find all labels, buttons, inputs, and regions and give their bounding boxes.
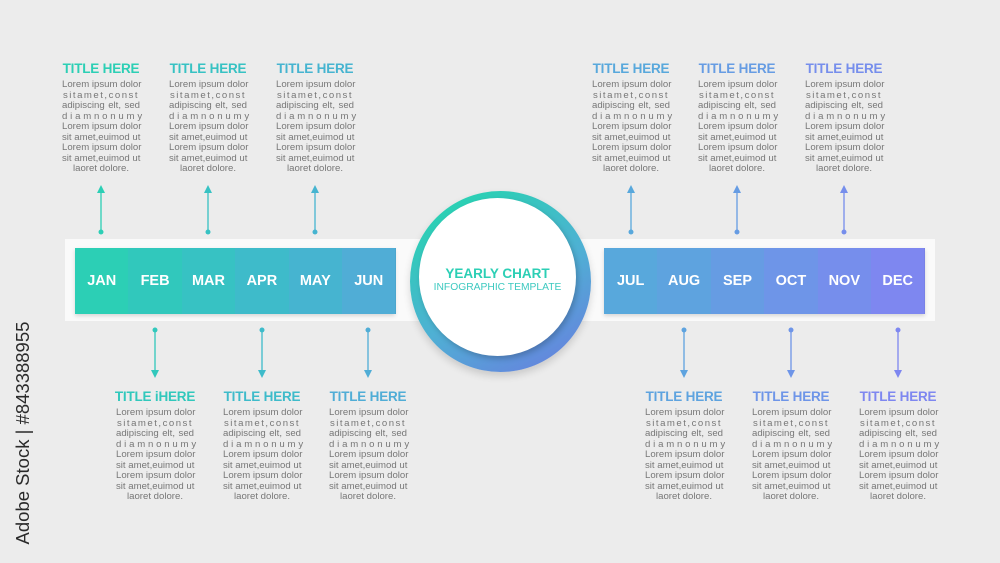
month: FEB <box>128 248 183 314</box>
text block: NOV <box>805 61 888 174</box>
text block: SEP: adipiscing elt, sed <box>698 100 776 111</box>
month: NOV: NOV <box>829 273 860 289</box>
text block: FEB: Lorem ipsum dolor <box>116 449 195 460</box>
text block: JUN: Lorem ipsum dolor <box>329 407 408 418</box>
text block: JUN: TITLE HERE <box>330 389 406 404</box>
text block: JUN: Lorem ipsum dolor <box>329 470 408 481</box>
text block: JAN: TITLE HERE <box>63 61 139 76</box>
text block: NOV: sitamet,const <box>806 90 882 100</box>
text block: SEP: laoret dolore. <box>709 163 765 174</box>
text block: FEB: TITLE iHERE <box>115 389 195 404</box>
month bar: Jul-Dec <box>604 248 925 314</box>
text block: MAY: sit amet,euimod ut <box>276 132 354 142</box>
month: OCT <box>764 248 819 314</box>
watermark: vertical stock id: Adobe Stock | #843388955 <box>12 322 33 544</box>
text block: JAN: Lorem ipsum dolor <box>62 121 141 132</box>
month: JAN: JAN <box>87 273 116 289</box>
inner white disc with title <box>419 198 576 356</box>
text block: JUL: TITLE HERE <box>593 61 669 76</box>
arrow: SEP <box>733 185 741 234</box>
month: JUL <box>604 248 658 314</box>
text block: FEB: sitamet,const <box>117 418 193 428</box>
text block: JAN: adipiscing elt, sed <box>62 100 140 111</box>
text block: NOV: Lorem ipsum dolor <box>805 79 884 90</box>
text block: MAY: Lorem ipsum dolor <box>276 142 355 153</box>
text block: JUL: laoret dolore. <box>603 163 659 174</box>
arrow: MAR <box>204 185 212 234</box>
text block: JUL: sit amet,euimod ut <box>592 132 670 142</box>
arrow: FEB <box>151 328 159 378</box>
text block: SEP: sitamet,const <box>699 90 775 100</box>
text block: APR: sit amet,euimod ut <box>223 480 301 492</box>
arrow: JUL <box>627 185 635 234</box>
month: AUG: AUG <box>668 273 700 289</box>
text block: AUG: Lorem ipsum dolor <box>645 449 724 460</box>
text block: DEC: Lorem ipsum dolor <box>859 449 938 460</box>
month: MAR: MAR <box>192 273 225 289</box>
text block: SEP: Lorem ipsum dolor <box>698 142 777 153</box>
text block: MAY: sitamet,const <box>277 90 353 100</box>
month: APR <box>235 248 290 314</box>
center circle <box>410 191 591 372</box>
text block: APR: Lorem ipsum dolor <box>223 449 302 460</box>
text block: JUN <box>329 389 412 502</box>
text block: JAN: laoret dolore. <box>73 163 129 174</box>
text block: MAR: sit amet,euimod ut <box>169 132 247 142</box>
month: MAY: MAY <box>300 273 331 289</box>
text block: JUN: diamnonumy <box>329 438 412 450</box>
text block: FEB: laoret dolore. <box>127 491 183 502</box>
text block: APR: Lorem ipsum dolor <box>223 470 302 481</box>
month: NOV <box>818 248 872 314</box>
text block: APR: laoret dolore. <box>234 491 290 502</box>
month: MAY <box>289 248 343 314</box>
arrow: NOV <box>840 185 848 234</box>
text block: JUN: laoret dolore. <box>340 491 396 502</box>
text block: SEP <box>698 61 781 174</box>
text block: APR: diamnonumy <box>223 438 306 450</box>
arrow: AUG <box>680 328 688 378</box>
text block: NOV: adipiscing elt, sed <box>805 100 883 111</box>
text block: MAY <box>276 61 359 174</box>
text block: FEB: adipiscing elt, sed <box>116 428 194 439</box>
arrow: JAN <box>97 185 105 234</box>
text block: DEC: TITLE HERE <box>860 389 936 404</box>
text block: NOV: sit amet,euimod ut <box>805 152 883 164</box>
text block: JUN: adipiscing elt, sed <box>329 428 407 439</box>
text block: MAY: adipiscing elt, sed <box>276 100 354 111</box>
white timeline strip <box>65 239 935 321</box>
text block: JAN: sit amet,euimod ut <box>62 152 140 164</box>
text block: JUL: Lorem ipsum dolor <box>592 79 671 90</box>
text block: APR: Lorem ipsum dolor <box>223 407 302 418</box>
text block: MAR: Lorem ipsum dolor <box>169 142 248 153</box>
text block: OCT: diamnonumy <box>752 438 835 450</box>
text block: MAR: laoret dolore. <box>180 163 236 174</box>
text block: MAR: Lorem ipsum dolor <box>169 79 248 90</box>
text block: NOV: TITLE HERE <box>806 61 882 76</box>
text block: MAY: Lorem ipsum dolor <box>276 79 355 90</box>
text block: MAR: TITLE HERE <box>170 61 246 76</box>
text block: DEC <box>859 389 942 502</box>
text block: JUN: Lorem ipsum dolor <box>329 449 408 460</box>
text block: FEB: Lorem ipsum dolor <box>116 407 195 418</box>
text block: JUN: sit amet,euimod ut <box>329 460 407 470</box>
text block: DEC: Lorem ipsum dolor <box>859 407 938 418</box>
text block: MAR: sitamet,const <box>170 90 246 100</box>
text block: APR: adipiscing elt, sed <box>223 428 301 439</box>
text block: DEC: sitamet,const <box>860 418 936 428</box>
text block: OCT: TITLE HERE <box>753 389 829 404</box>
text block: JUL: Lorem ipsum dolor <box>592 121 671 132</box>
month: JUN <box>342 248 396 314</box>
text block: FEB: diamnonumy <box>116 438 199 450</box>
text block: JUL: sitamet,const <box>593 90 669 100</box>
text block: AUG: Lorem ipsum dolor <box>645 407 724 418</box>
text block: OCT: sit amet,euimod ut <box>752 460 830 470</box>
text block: DEC: sit amet,euimod ut <box>859 480 937 492</box>
text block: MAR: diamnonumy <box>169 110 252 122</box>
text block: SEP: TITLE HERE <box>699 61 775 76</box>
month: AUG <box>657 248 712 314</box>
text block: SEP: sit amet,euimod ut <box>698 132 776 142</box>
text block: JUL: sit amet,euimod ut <box>592 152 670 164</box>
text block: AUG: Lorem ipsum dolor <box>645 470 724 481</box>
month: FEB: FEB <box>141 273 170 289</box>
text block: OCT <box>752 389 835 502</box>
text block: DEC: laoret dolore. <box>870 491 926 502</box>
month: OCT: OCT <box>776 273 806 289</box>
text block: DEC: diamnonumy <box>859 438 942 450</box>
text block: AUG: laoret dolore. <box>656 491 712 502</box>
text block: NOV: Lorem ipsum dolor <box>805 142 884 153</box>
text block: MAR: adipiscing elt, sed <box>169 100 247 111</box>
month: SEP: SEP <box>723 273 752 289</box>
text block: FEB <box>115 389 199 502</box>
text block: OCT: sit amet,euimod ut <box>752 480 830 492</box>
text block: DEC: Lorem ipsum dolor <box>859 470 938 481</box>
month: MAR <box>182 248 236 314</box>
month bar: Jan-Jun <box>75 248 395 314</box>
text block: AUG: adipiscing elt, sed <box>645 428 723 439</box>
arrow: MAY <box>311 185 319 234</box>
text block: APR: sit amet,euimod ut <box>223 460 301 470</box>
text block: SEP: Lorem ipsum dolor <box>698 79 777 90</box>
text block: JUL <box>592 61 675 174</box>
text block: JAN: sit amet,euimod ut <box>62 132 140 142</box>
month: JUN: JUN <box>354 273 383 289</box>
text block: JAN: Lorem ipsum dolor <box>62 79 141 90</box>
circle subtitle: INFOGRAPHIC TEMPLATE <box>434 282 561 293</box>
month: SEP <box>711 248 765 314</box>
text block: APR: TITLE HERE <box>224 389 300 404</box>
text block: JUL: diamnonumy <box>592 110 675 122</box>
text block: OCT: sitamet,const <box>753 418 829 428</box>
text block: DEC: adipiscing elt, sed <box>859 428 937 439</box>
arrow: APR <box>258 328 266 378</box>
text block: SEP: Lorem ipsum dolor <box>698 121 777 132</box>
text block: MAY: sit amet,euimod ut <box>276 152 354 164</box>
month: DEC: DEC <box>882 273 913 289</box>
text block: AUG: sit amet,euimod ut <box>645 460 723 470</box>
text block: AUG <box>645 389 728 502</box>
text block: DEC: sit amet,euimod ut <box>859 460 937 470</box>
text block: AUG: TITLE HERE <box>646 389 722 404</box>
text block: NOV: diamnonumy <box>805 110 888 122</box>
text block: OCT: Lorem ipsum dolor <box>752 470 831 481</box>
text block: JAN: diamnonumy <box>62 110 145 122</box>
text block: AUG: sitamet,const <box>646 418 722 428</box>
text block: AUG: diamnonumy <box>645 438 728 450</box>
text block: OCT: adipiscing elt, sed <box>752 428 830 439</box>
text block: APR: sitamet,const <box>224 418 300 428</box>
circle title: YEARLY CHART <box>445 266 550 281</box>
month: DEC <box>871 248 925 314</box>
text block: NOV: laoret dolore. <box>816 163 872 174</box>
text block: MAR <box>169 61 252 174</box>
text block: OCT: laoret dolore. <box>763 491 819 502</box>
text block: MAY: diamnonumy <box>276 110 359 122</box>
month: JAN <box>75 248 129 314</box>
text block: MAY: TITLE HERE <box>277 61 353 76</box>
text block: OCT: Lorem ipsum dolor <box>752 407 831 418</box>
text block: JAN <box>62 61 145 174</box>
text block: NOV: sit amet,euimod ut <box>805 132 883 142</box>
arrow: OCT <box>787 328 795 378</box>
month: APR: APR <box>247 273 277 289</box>
text block: FEB: sit amet,euimod ut <box>116 460 194 470</box>
text block: AUG: sit amet,euimod ut <box>645 480 723 492</box>
text block: FEB: Lorem ipsum dolor <box>116 470 195 481</box>
text block: SEP: sit amet,euimod ut <box>698 152 776 164</box>
arrow: DEC <box>894 328 902 378</box>
text block: FEB: sit amet,euimod ut <box>116 480 194 492</box>
text block: JAN: sitamet,const <box>63 90 139 100</box>
text block: SEP: diamnonumy <box>698 110 781 122</box>
text block: APR <box>223 389 306 502</box>
text block: MAR: Lorem ipsum dolor <box>169 121 248 132</box>
month: JUL: JUL <box>617 273 644 289</box>
text block: OCT: Lorem ipsum dolor <box>752 449 831 460</box>
text block: JUN: sitamet,const <box>330 418 406 428</box>
text block: JUN: sit amet,euimod ut <box>329 480 407 492</box>
text block: JUL: adipiscing elt, sed <box>592 100 670 111</box>
text block: MAY: Lorem ipsum dolor <box>276 121 355 132</box>
arrow: JUN <box>364 328 372 378</box>
text block: NOV: Lorem ipsum dolor <box>805 121 884 132</box>
text block: MAR: sit amet,euimod ut <box>169 152 247 164</box>
text block: MAY: laoret dolore. <box>287 163 343 174</box>
text block: JUL: Lorem ipsum dolor <box>592 142 671 153</box>
text block: JAN: Lorem ipsum dolor <box>62 142 141 153</box>
